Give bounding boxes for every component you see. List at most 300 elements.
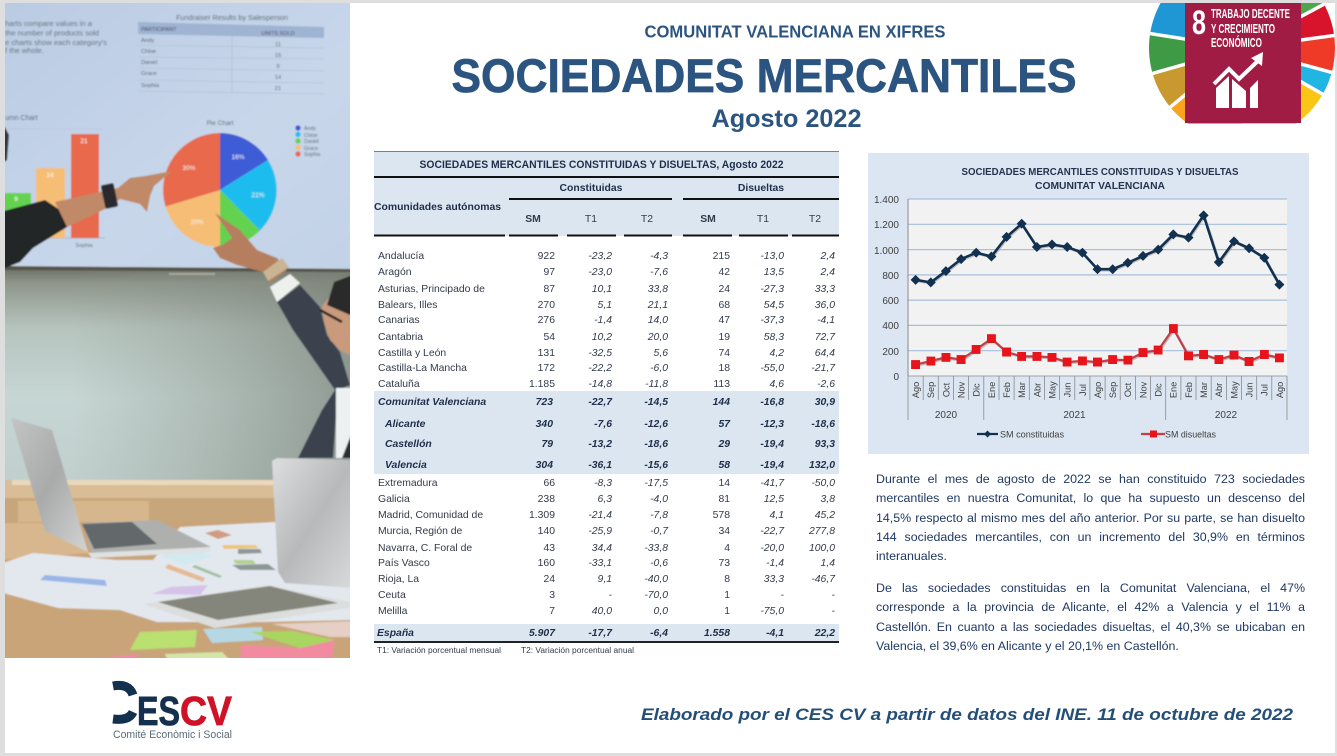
plot area	[908, 199, 1287, 376]
row: Aragón: -23,0	[588, 267, 612, 278]
row: Cataluña: 113	[713, 379, 730, 390]
row: Rioja: -46,7	[811, 574, 836, 585]
row: Navarra: 100,0	[809, 543, 835, 554]
pie chart on screen: Chloe	[304, 133, 318, 139]
x axis with months: Oct	[1123, 382, 1133, 397]
row: Ceuta: -	[832, 590, 836, 601]
row: Canarias: Canarias	[378, 315, 420, 326]
x axis with months: Dic	[972, 383, 982, 397]
row: Navarra: -20,0	[760, 543, 784, 554]
row: Andalucía	[378, 251, 835, 262]
row: España: -17,7	[588, 628, 613, 639]
x axis with months: Ago	[911, 382, 921, 398]
row: Alicante: -18,6	[811, 419, 835, 430]
row: Castilla y León: 131	[538, 348, 555, 359]
row: Extremadura: 66	[543, 478, 555, 489]
row: Melilla: -	[832, 606, 836, 617]
kicker: COMUNITAT VALENCIANA EN XIFRES	[644, 22, 946, 42]
line series: SM disueltas	[916, 329, 1280, 366]
papers on desk	[0, 522, 355, 622]
screen table	[138, 13, 324, 94]
row: Balears: 270	[538, 300, 555, 311]
x axis with months: Ago	[1093, 382, 1103, 398]
row: Valencia: -19,4	[760, 460, 784, 471]
x axis with months: Ene	[987, 382, 997, 398]
row: Aragón: 13,5	[764, 267, 784, 278]
row: Asturias: 87	[543, 284, 555, 295]
screen text block	[5, 19, 107, 55]
row: Canarias: 47	[718, 315, 730, 326]
row: Comunitat Valenciana: -14,5	[644, 397, 668, 408]
row: Castilla-La Mancha: -21,7	[811, 363, 836, 374]
row: Balears	[378, 300, 835, 311]
row: Alicante: 57	[718, 419, 731, 430]
row: Melilla: 1	[724, 606, 730, 617]
screen text block: e charts show each category's	[5, 38, 107, 47]
screen text block: f the whole.	[5, 46, 44, 55]
row: Andalucía: 2,4	[820, 251, 835, 262]
x axis with months: Dic	[1154, 383, 1164, 397]
row: Alicante: -12,3	[760, 419, 784, 430]
row: Navarra: Navarra, C. Foral de	[378, 543, 472, 554]
row: Castilla-La Mancha	[378, 363, 836, 374]
row: Rioja: 8	[724, 574, 730, 585]
left sleeve lower	[0, 475, 19, 522]
row: Balears: 68	[718, 300, 730, 311]
logo: CES CV: Comité Econòmic i Social	[113, 729, 232, 741]
row: Asturias: -27,3	[760, 284, 784, 295]
row: Ceuta	[378, 590, 836, 601]
y axis: 0	[893, 372, 899, 383]
chart title: SOCIEDADES MERCANTILES CONSTITUIDAS Y DISUELTAS	[962, 166, 1238, 178]
row: Navarra: 34,4	[592, 543, 612, 554]
table header band: SM	[525, 214, 541, 225]
x axis with months: Jul	[1078, 384, 1088, 396]
screen table: PARTICIPANT	[141, 27, 177, 33]
text block: second paragraph: De las sociedades constituidas en la Comunitat Valenciana, el 47%	[876, 581, 1305, 595]
row: Castilla y León: -32,5	[588, 348, 612, 359]
row: Castilla y León: 64,4	[815, 348, 835, 359]
x axis with months: 2022	[1215, 410, 1238, 421]
row: Castilla-La Mancha: -55,0	[760, 363, 784, 374]
SDG number and label: Y CRECIMIENTO	[1211, 21, 1275, 36]
row: Cantabria: 72,7	[815, 332, 836, 343]
row: Cataluña: -2,6	[817, 379, 835, 390]
row: Asturias: 10,1	[592, 284, 612, 295]
row: Navarra: 4	[724, 543, 730, 554]
row: Andalucía: -4,3	[650, 251, 668, 262]
highlight band: España	[374, 624, 839, 641]
row: País Vasco: -1,4	[766, 558, 784, 569]
table: sociedades mercantiles por comunidad	[374, 151, 839, 655]
row: Murcia: 277,8	[808, 526, 835, 537]
row: Aragón: 2,4	[820, 267, 835, 278]
row: Galicia: 81	[718, 494, 730, 505]
SDG ring segments	[1149, 3, 1335, 124]
row: Rioja	[378, 574, 836, 585]
row: Cataluña: 1.185	[529, 379, 555, 390]
row: Murcia: Murcia, Región de	[378, 526, 463, 537]
row: Madrid: 45,2	[815, 510, 835, 521]
row: Cataluña	[378, 379, 835, 390]
x axis with months: Jun	[1244, 383, 1254, 397]
highlight band: Comunitat Valenciana	[374, 391, 839, 474]
row: España: -6,4	[650, 628, 668, 639]
row: País Vasco: 73	[718, 558, 730, 569]
line series: SM constituidas	[916, 215, 1280, 286]
icon: rising bars and arrow	[1214, 52, 1263, 108]
x axis with months: Abr	[1214, 383, 1224, 397]
row: Comunitat Valenciana: -22,7	[588, 397, 613, 408]
pie chart on screen: 21%	[251, 192, 265, 199]
logo: CES CV	[112, 680, 233, 741]
column chart on screen: 9	[14, 196, 18, 203]
row: Madrid	[378, 510, 835, 521]
row: Valencia: 58	[718, 460, 730, 471]
row: Castellón	[385, 439, 835, 450]
pie chart on screen: Daniel	[304, 139, 319, 145]
row: Galicia: 238	[538, 494, 555, 505]
y axis: 1.200	[874, 220, 899, 231]
text block: first paragraph	[876, 472, 1305, 563]
row: Cantabria: 19	[718, 332, 730, 343]
row: Galicia: 3,8	[821, 494, 835, 505]
row: Extremadura: -17,5	[644, 478, 668, 489]
row: Ceuta: 1	[724, 590, 730, 601]
x axis with months: May	[1047, 381, 1057, 399]
row: Murcia: 140	[538, 526, 555, 537]
table header band	[374, 151, 839, 236]
table header band: T1	[585, 214, 597, 225]
row: Valencia: Valencia	[385, 460, 427, 471]
x axis with months: Mar	[1199, 382, 1209, 398]
row: España: -4,1	[766, 628, 784, 639]
SDG number and label: 8	[1192, 4, 1206, 42]
pie chart on screen: Grace	[304, 146, 318, 152]
date: Agosto 2022	[712, 105, 862, 133]
row: Madrid: 1.309	[529, 510, 555, 521]
column chart on screen: 21	[80, 138, 88, 145]
x axis with months: Ago	[1275, 382, 1285, 398]
row: Galicia: 12,5	[764, 494, 784, 505]
text block: first paragraph: interanuales.	[876, 549, 947, 563]
screen table: Grace	[141, 71, 157, 77]
x axis with months: Sep	[1108, 382, 1118, 398]
row: Castilla y León: 74	[718, 348, 730, 359]
screen table: 9	[276, 64, 280, 70]
SDG number and label	[1192, 4, 1290, 50]
sticky notes	[68, 621, 355, 662]
row: Asturias: 33,3	[815, 284, 835, 295]
row: Melilla: 40,0	[592, 606, 612, 617]
row: Castilla-La Mancha: 18	[718, 363, 730, 374]
text block: first paragraph: 14,5% respecto al mismo mes del año anterior. Por su parte, se han disuelto	[876, 511, 1305, 525]
row: Balears: 21,1	[647, 300, 668, 311]
tablet	[143, 585, 355, 628]
screen text block: harts compare values in a	[5, 19, 93, 28]
row: Galicia: Galicia	[378, 494, 410, 505]
row: Comunitat Valenciana	[378, 397, 835, 408]
y axis: 1.400	[874, 195, 899, 206]
row: Balears: Balears, Illes	[378, 300, 437, 311]
row: Murcia: -25,9	[588, 526, 612, 537]
row: Canarias: -1,4	[594, 315, 612, 326]
row: Melilla: Melilla	[378, 606, 408, 617]
row: España: España	[377, 628, 414, 639]
row: Andalucía: -23,2	[588, 251, 612, 262]
y axis: 400	[882, 321, 899, 332]
SDG number and label: ECONÓMICO	[1211, 35, 1262, 50]
wall	[0, 268, 355, 483]
y axis: 800	[882, 271, 899, 282]
text block: second paragraph: Castellón. En cuanto a las sociedades disueltas, el 40,3% se ubicaban en	[876, 620, 1305, 634]
row: Canarias: 14,0	[648, 315, 668, 326]
row: Navarra: -33,8	[644, 543, 668, 554]
row: Castilla y León: 4,2	[770, 348, 784, 359]
screen table: Fundraiser Results by Salesperson	[176, 13, 288, 22]
screen table: Sophia	[141, 83, 160, 89]
y axis: 1.000	[874, 246, 899, 257]
pie chart on screen: Sophia	[304, 152, 320, 158]
screen table: Daniel	[141, 60, 157, 66]
chart panel: sociedades constituidas y disueltas	[868, 153, 1309, 454]
row: Galicia: 6,3	[598, 494, 612, 505]
row: País Vasco: País Vasco	[378, 558, 430, 569]
row: Extremadura: Extremadura	[378, 478, 438, 489]
screen table: 14	[275, 75, 282, 81]
row: Cantabria: 20,0	[647, 332, 668, 343]
main title: SOCIEDADES MERCANTILES	[452, 49, 1076, 102]
table header band: Constituidas	[560, 183, 623, 194]
row: Cataluña: Cataluña	[378, 379, 420, 390]
row: Madrid: -21,4	[588, 510, 612, 521]
legend: SM constituidas	[1000, 430, 1064, 440]
row: Castellón: 29	[717, 439, 730, 450]
row: Alicante: -12,6	[644, 419, 668, 430]
row: Murcia: 34	[718, 526, 730, 537]
screen table: 11	[275, 42, 281, 48]
row: Valencia: -15,6	[644, 460, 668, 471]
row: Aragón: Aragón	[378, 267, 412, 278]
row: Asturias: Asturias, Principado de	[378, 284, 485, 295]
column chart on screen: umn Chart	[5, 115, 38, 122]
icon: SDG 8 badge	[1149, 3, 1335, 124]
row: Ceuta: -	[609, 590, 613, 601]
row: Andalucía: -13,0	[760, 251, 784, 262]
photo: people pointing at charts on a screen over a desk	[5, 3, 350, 658]
x axis with months	[908, 376, 1287, 421]
table header band: SOCIEDADES MERCANTILES CONSTITUIDAS Y DISUELTAS, Agosto 2022	[420, 159, 784, 171]
row: Balears: 5,1	[598, 300, 612, 311]
table header band: T2	[641, 214, 653, 225]
row: Comunitat Valenciana: 723	[536, 397, 553, 408]
row: Castilla y León: 5,6	[654, 348, 668, 359]
row: Andalucía: 215	[713, 251, 730, 262]
row: Canarias	[378, 315, 835, 326]
x axis with months: Sep	[926, 382, 936, 398]
row: Rioja: -40,0	[644, 574, 668, 585]
row: España: 1.558	[704, 628, 730, 639]
text block: first paragraph: mercantiles en nuestra Comunitat, lo que ha supuesto un descenso del	[876, 491, 1305, 505]
row: Aragón: 42	[718, 267, 730, 278]
row: Comunitat Valenciana: 144	[713, 397, 730, 408]
row: Extremadura: 14	[718, 478, 730, 489]
row: País Vasco: -33,1	[588, 558, 612, 569]
chart title	[962, 166, 1238, 192]
screen table: 15	[275, 53, 281, 59]
x axis with months: Nov	[956, 381, 966, 398]
x axis with months: May	[1229, 381, 1239, 399]
row: País Vasco: 160	[538, 558, 555, 569]
row: Castilla y León	[378, 348, 835, 359]
row: Navarra	[378, 543, 835, 554]
table footnotes: T1: Variación porcentual mensual	[377, 646, 501, 655]
row: Balears: 36,0	[815, 300, 835, 311]
row: Comunitat Valenciana: 30,9	[815, 397, 835, 408]
row: Cantabria: 54	[543, 332, 555, 343]
logo: CES CV: CV	[180, 688, 233, 734]
row: Alicante: 340	[536, 419, 553, 430]
screen text block: the number of products sold	[5, 28, 99, 38]
row: Comunitat Valenciana: Comunitat Valenciana	[378, 397, 486, 408]
right arm pointing at pie	[213, 213, 350, 458]
row: Rioja: 24	[543, 574, 555, 585]
text block: second paragraph: corresponde a la provincia de Alicante, el 42% a Valencia y el 11% a	[876, 600, 1305, 614]
row: Canarias: -37,3	[760, 315, 784, 326]
row: Cantabria: 10,2	[592, 332, 612, 343]
row: Ceuta: -	[781, 590, 785, 601]
text block: second paragraph	[876, 581, 1305, 653]
row: Comunitat Valenciana: -16,8	[760, 397, 784, 408]
x axis with months: Feb	[1002, 382, 1012, 398]
row: Castilla-La Mancha: Castilla-La Mancha	[378, 363, 467, 374]
pie chart on screen: Andy	[304, 126, 316, 132]
row: Castilla y León: Castilla y León	[378, 348, 446, 359]
table header band: T1	[757, 214, 769, 225]
row: Murcia: -0,7	[650, 526, 669, 537]
y axis: 600	[882, 296, 899, 307]
x axis with months: 2021	[1063, 410, 1086, 421]
x axis with months: Oct	[941, 382, 951, 397]
row: Ceuta: Ceuta	[378, 590, 406, 601]
row: Canarias: -4,1	[817, 315, 835, 326]
row: Valencia: 132,0	[809, 460, 835, 471]
row: Andalucía: 922	[538, 251, 555, 262]
maroon SDG square	[1185, 3, 1301, 123]
x axis with months: 2020	[935, 410, 958, 421]
table header band: SM	[700, 214, 716, 225]
row: País Vasco: 1,4	[821, 558, 835, 569]
x axis with months: Feb	[1184, 382, 1194, 398]
row: Murcia	[378, 526, 835, 537]
man's head at right	[322, 283, 355, 358]
laptop right	[272, 458, 355, 588]
x axis with months: Jul	[1260, 384, 1270, 396]
column chart on screen: 14	[46, 172, 54, 179]
row: País Vasco	[378, 558, 835, 569]
row: Aragón: 97	[543, 267, 555, 278]
row: Aragón: -7,6	[650, 267, 668, 278]
pie chart on screen: 30%	[182, 165, 196, 172]
row: España	[377, 628, 835, 639]
row: Madrid: 4,1	[770, 510, 784, 521]
row: Madrid: Madrid, Comunidad de	[378, 510, 483, 521]
row: Rioja: 33,3	[764, 574, 784, 585]
row: Asturias: 24	[718, 284, 730, 295]
table header band: Disueltas	[738, 183, 784, 194]
row: Cataluña: -11,8	[645, 379, 668, 390]
row: Valencia	[385, 460, 835, 471]
row: Cantabria: Cantabria	[378, 332, 423, 343]
row: Castellón: Castellón	[385, 439, 432, 450]
text block: first paragraph: Durante el mes de agosto de 2022 se han constituido 723 sociedades	[876, 472, 1305, 486]
row: Cantabria: 58,3	[764, 332, 784, 343]
row: Melilla	[378, 606, 836, 617]
row: Cataluña: -14,8	[588, 379, 612, 390]
row: Valencia: -36,1	[588, 460, 612, 471]
row: Extremadura: -41,7	[760, 478, 785, 489]
text block: first paragraph: 144 sociedades mercantiles, con un incremento del 30,9% en términos	[876, 530, 1305, 544]
table footnotes: T2: Variación porcentual anual	[521, 646, 634, 655]
text block: second paragraph: Valencia, el 39,6% en Alicante y el 20,1% en Castellón.	[876, 639, 1179, 653]
column chart on screen: Sophia	[75, 243, 93, 249]
row: Aragón	[378, 267, 835, 278]
row: Alicante	[384, 419, 835, 430]
row: Castellón: -19,4	[760, 439, 784, 450]
laptop left	[11, 418, 211, 558]
legend: SM disueltas	[1165, 430, 1216, 440]
row: Madrid: 578	[713, 510, 730, 521]
row: Navarra: 43	[543, 543, 555, 554]
row: Murcia: -22,7	[760, 526, 785, 537]
x axis with months: Mar	[1017, 382, 1027, 398]
row: Castellón: -18,6	[644, 439, 668, 450]
screen	[0, 0, 355, 270]
row: Castilla-La Mancha: 172	[538, 363, 555, 374]
logo: CES CV: ES	[137, 688, 180, 734]
legend	[977, 430, 1216, 440]
row: Valencia: 304	[536, 460, 553, 471]
row: Asturias	[378, 284, 835, 295]
row: Rioja: 9,1	[598, 574, 612, 585]
pie chart on screen: 16%	[231, 154, 245, 161]
row: Melilla: -75,0	[760, 606, 784, 617]
pie chart on screen	[163, 120, 320, 247]
x axis with months: Nov	[1138, 381, 1148, 398]
chart title: COMUNITAT VALENCIANA	[1035, 180, 1165, 192]
row: Madrid: -7,8	[650, 510, 668, 521]
row: Andalucía: Andalucía	[378, 251, 424, 262]
row: Galicia	[378, 494, 835, 505]
row: Melilla: 7	[549, 606, 555, 617]
row: Ceuta: -70,0	[644, 590, 668, 601]
row: Castellón: 79	[541, 439, 553, 450]
y axis	[874, 195, 908, 383]
row: Cantabria	[378, 332, 836, 343]
x axis with months: Jun	[1063, 383, 1073, 397]
row: Castilla-La Mancha: -22,2	[588, 363, 612, 374]
furniture	[0, 480, 355, 498]
row: España: 5.907	[529, 628, 556, 639]
row: España: 22,2	[814, 628, 835, 639]
row: Asturias: 33,8	[648, 284, 668, 295]
row: Alicante: -7,6	[594, 419, 612, 430]
row: Rioja: Rioja, La	[378, 574, 419, 585]
row: Cataluña: 4,6	[770, 379, 784, 390]
pie chart on screen: Pie Chart	[206, 120, 234, 127]
screen table: UNITS SOLD	[261, 31, 295, 37]
row: Canarias: 276	[538, 315, 555, 326]
